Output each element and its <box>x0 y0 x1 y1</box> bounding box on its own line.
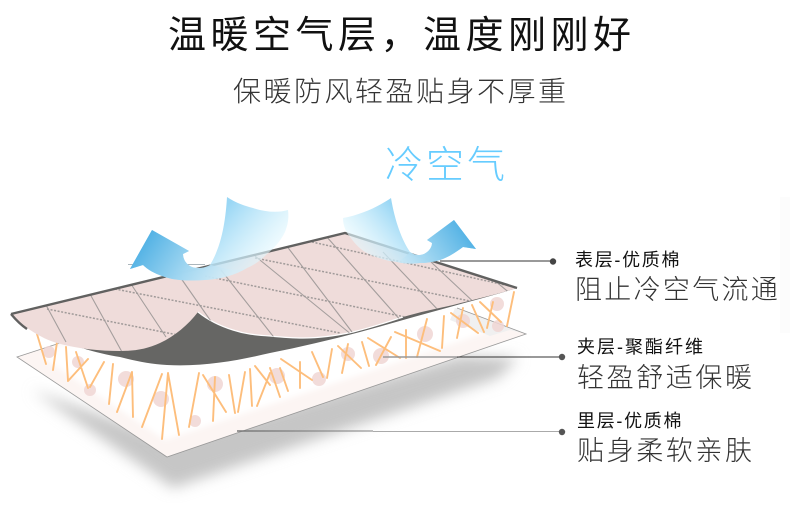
outer layer name: 表层-优质棉 <box>575 250 681 270</box>
inner layer benefit: 贴身柔软亲肤 <box>577 436 755 466</box>
quilting lines <box>46 236 512 360</box>
leader line: outer layer <box>440 258 556 265</box>
diagram: layered fabric <box>10 197 566 493</box>
arrow: right cold air deflected <box>343 198 476 264</box>
middle layer benefit: 轻盈舒适保暖 <box>577 363 755 393</box>
cold air label: 冷空气 <box>385 145 508 187</box>
title: 温暖空气层，温度刚刚好 <box>168 15 636 57</box>
arrow: left cold air deflected <box>128 197 288 281</box>
leader line: middle layer <box>383 354 565 360</box>
layer: outer quilted pink <box>11 233 517 360</box>
panel outline <box>11 233 517 314</box>
layer: inner sheet <box>17 305 526 457</box>
faint right strip <box>780 197 790 333</box>
cast shadow <box>32 356 518 488</box>
polyester fibers <box>37 292 514 439</box>
label: middle layer <box>577 337 755 393</box>
layer: padding dark <box>11 288 517 365</box>
subtitle: 保暖防风轻盈贴身不厚重 <box>233 76 569 107</box>
leader line: inner layer <box>237 429 565 435</box>
outer layer benefit: 阻止冷空气流通 <box>575 275 780 305</box>
label: inner layer <box>577 411 755 466</box>
polyester fill circles <box>43 297 504 427</box>
inner layer name: 里层-优质棉 <box>577 411 683 431</box>
middle layer name: 夹层-聚酯纤维 <box>577 337 705 357</box>
label: outer layer <box>575 250 780 305</box>
